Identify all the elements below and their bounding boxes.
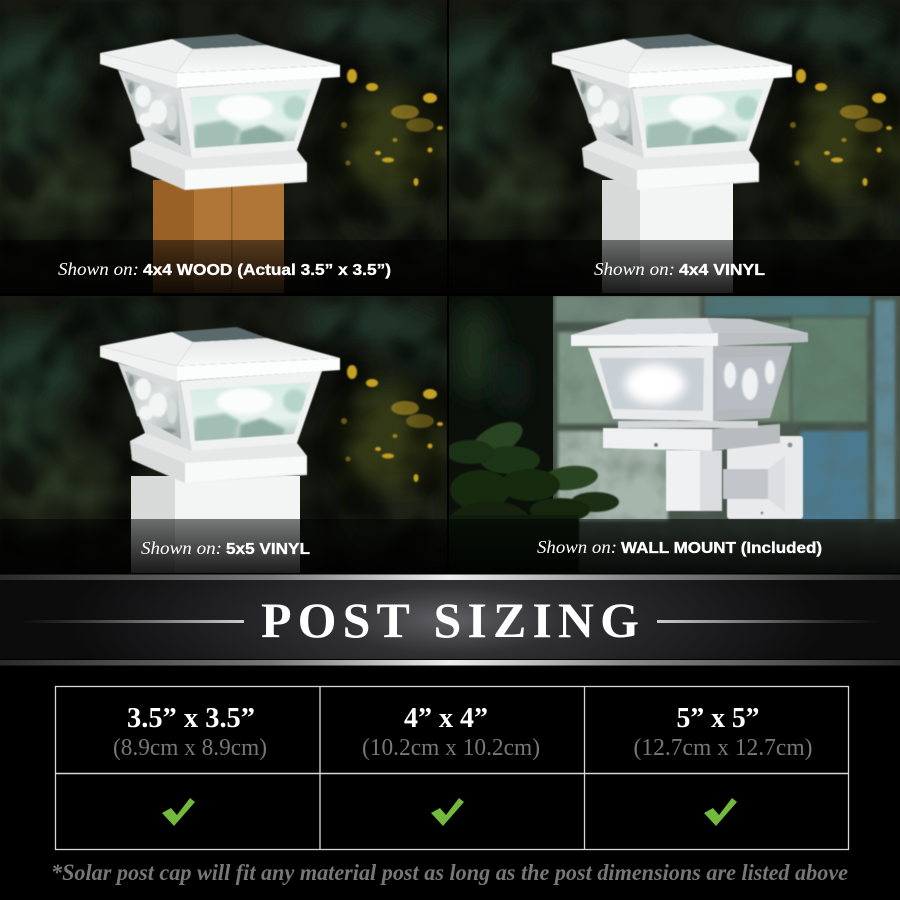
caption: Shown on: [537,537,617,557]
background: garden foliage [0,0,447,266]
sizing table [55,686,849,850]
solar post cap: wall mounted [571,318,808,451]
caption: Shown on: [141,538,222,558]
size 3.5 inch [113,702,267,761]
caption band [0,240,447,293]
caption band [449,519,900,573]
mount post [666,450,722,511]
icon: check 3 [704,798,737,826]
caption band [0,519,447,573]
caption: 4x4 WOOD (Actual 3.5” x 3.5”) [143,262,391,279]
title: POST SIZING [261,592,639,648]
solar post cap [552,34,792,190]
wall bracket [723,436,803,519]
panel: 4x4 vinyl post [429,0,900,293]
background: stone wall [553,296,900,573]
icon: check 1 [162,798,195,826]
caption: Shown on: [594,259,675,279]
vinyl post [131,476,300,573]
title banner [0,573,900,900]
vinyl post [602,180,733,293]
caption: 4x4 VINYL [679,262,765,279]
caption [594,262,765,276]
caption: WALL MOUNT (Included) [621,540,822,557]
size 5 inch: (12.7cm x 12.7cm) [634,735,812,761]
panel: 4x4 wood post [0,0,455,293]
background: garden foliage [0,296,447,550]
plant leaves [446,414,619,573]
background: dark foliage [449,296,553,516]
panel: wall mount [446,296,900,573]
caption [58,262,390,279]
caption [141,542,310,554]
size 5 inch [634,702,812,761]
icon: check 2 [431,798,464,826]
caption band [449,240,900,293]
caption: Shown on: [58,259,139,279]
background: garden foliage [449,0,900,266]
caption: 5x5 VINYL [226,541,310,558]
wood post [153,180,284,293]
size 4 inch [362,702,540,761]
size 3.5 inch: (8.9cm x 8.9cm) [113,735,267,761]
size 4 inch: (10.2cm x 10.2cm) [362,735,540,761]
solar post cap [100,34,340,190]
size 3.5 inch: 3.5” x 3.5” [127,702,255,734]
footnote: *Solar post cap will fit any material post as long as the post dimensions are listed above [51,860,848,885]
caption [537,540,822,557]
size 4 inch: 4” x 4” [404,702,488,734]
solar post cap [100,327,340,483]
size 5 inch: 5” x 5” [676,702,760,734]
panel: 5x5 vinyl post [0,296,455,589]
